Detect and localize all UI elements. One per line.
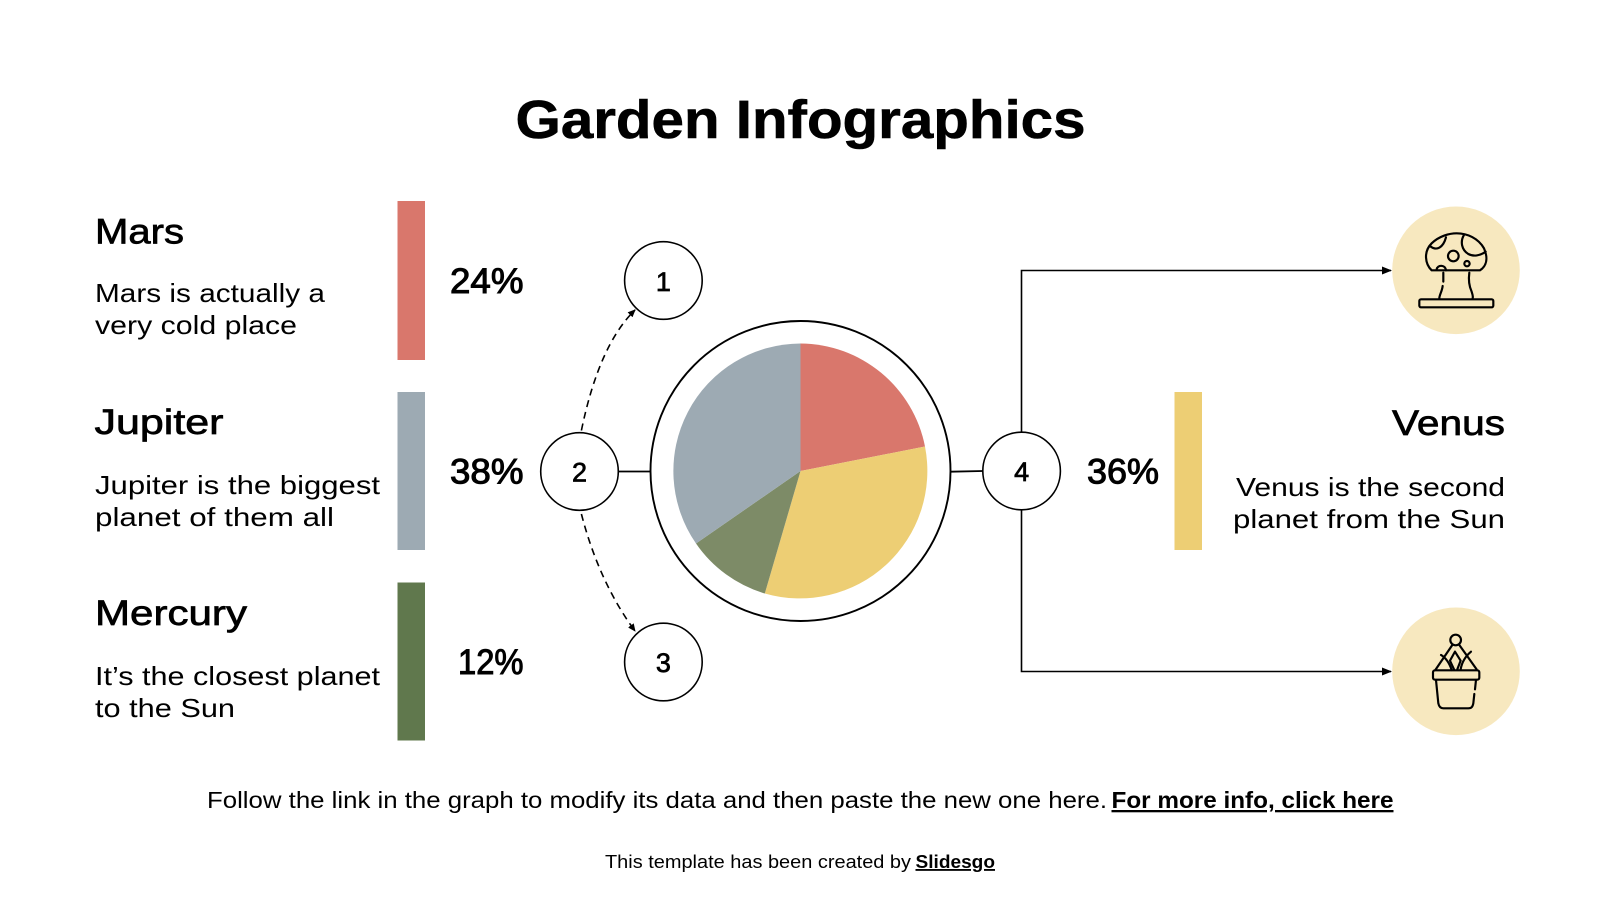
dashed arrow: 2 to 1 <box>581 310 635 430</box>
slice: red <box>800 344 925 471</box>
text block: Venus description: planet from the Sun <box>1233 504 1505 534</box>
bracket arrow: to plant <box>1022 510 1391 672</box>
pie chart <box>650 321 950 621</box>
slice: olive <box>696 471 800 594</box>
value: 38%: 38% <box>450 452 524 492</box>
node 1: 1 <box>656 267 671 297</box>
node 4 <box>983 432 1060 510</box>
text block: Mercury description: to the Sun <box>95 693 235 723</box>
slice: yellow <box>765 446 927 598</box>
panel: Mars <box>95 201 524 360</box>
bar: Jupiter <box>398 392 425 550</box>
pie outer ring <box>650 321 950 621</box>
connector: pie to 4 <box>951 470 983 473</box>
text block: Jupiter description: Jupiter is the biggest <box>95 470 381 500</box>
node 3: 3 <box>656 648 671 678</box>
footnote: link instruction: Follow the link in the graph to modify its data and then paste the new one here. <box>207 787 1107 813</box>
value: 24%: 24% <box>450 262 524 301</box>
text block: Jupiter description: planet of them all <box>95 502 334 532</box>
text block: Jupiter description <box>95 470 381 532</box>
credit line: Slidesgo <box>916 851 995 872</box>
text block: Venus description: Venus is the second <box>1236 472 1505 502</box>
title: Garden Infographics <box>516 90 1086 150</box>
dashed arrow: 2 to 3 <box>581 514 635 631</box>
icon: potted plant <box>1392 608 1520 735</box>
credit line: This template has been created by <box>605 851 912 872</box>
bar: Mercury <box>398 582 425 740</box>
value: 12%: 12% <box>458 643 524 682</box>
panel: Mercury <box>95 582 524 740</box>
text block: Mercury description <box>95 661 381 723</box>
text block: Mars description: very cold place <box>95 310 297 340</box>
node 2: 2 <box>572 458 587 488</box>
heading: Venus: Venus <box>1392 404 1505 443</box>
panel: Venus <box>1087 392 1505 550</box>
text block: Venus description <box>1233 472 1505 534</box>
heading: Mercury: Mercury <box>95 594 248 633</box>
text block: Mercury description: It’s the closest planet <box>95 661 381 691</box>
footnote: link instruction: For more info, click here <box>1112 787 1394 813</box>
slice: grey-blue <box>673 344 800 544</box>
heading: Mars: Mars <box>95 212 184 252</box>
heading: Jupiter: Jupiter <box>94 403 224 442</box>
node 4: 4 <box>1014 457 1029 487</box>
bar: Venus <box>1174 392 1202 550</box>
text block: Mars description <box>95 278 326 340</box>
icon: mushroom <box>1392 206 1520 334</box>
node 3 <box>625 623 702 701</box>
node 1 <box>625 242 702 319</box>
bar: Mars <box>398 201 425 360</box>
text block: Mars description: Mars is actually a <box>95 278 326 308</box>
footnote: link instruction <box>207 787 1394 813</box>
node 2 <box>541 433 618 510</box>
panel: Jupiter <box>94 392 524 550</box>
bracket arrow: to mushroom <box>1022 270 1391 432</box>
value: 36%: 36% <box>1087 452 1159 492</box>
connector: 2 to pie <box>618 470 650 472</box>
